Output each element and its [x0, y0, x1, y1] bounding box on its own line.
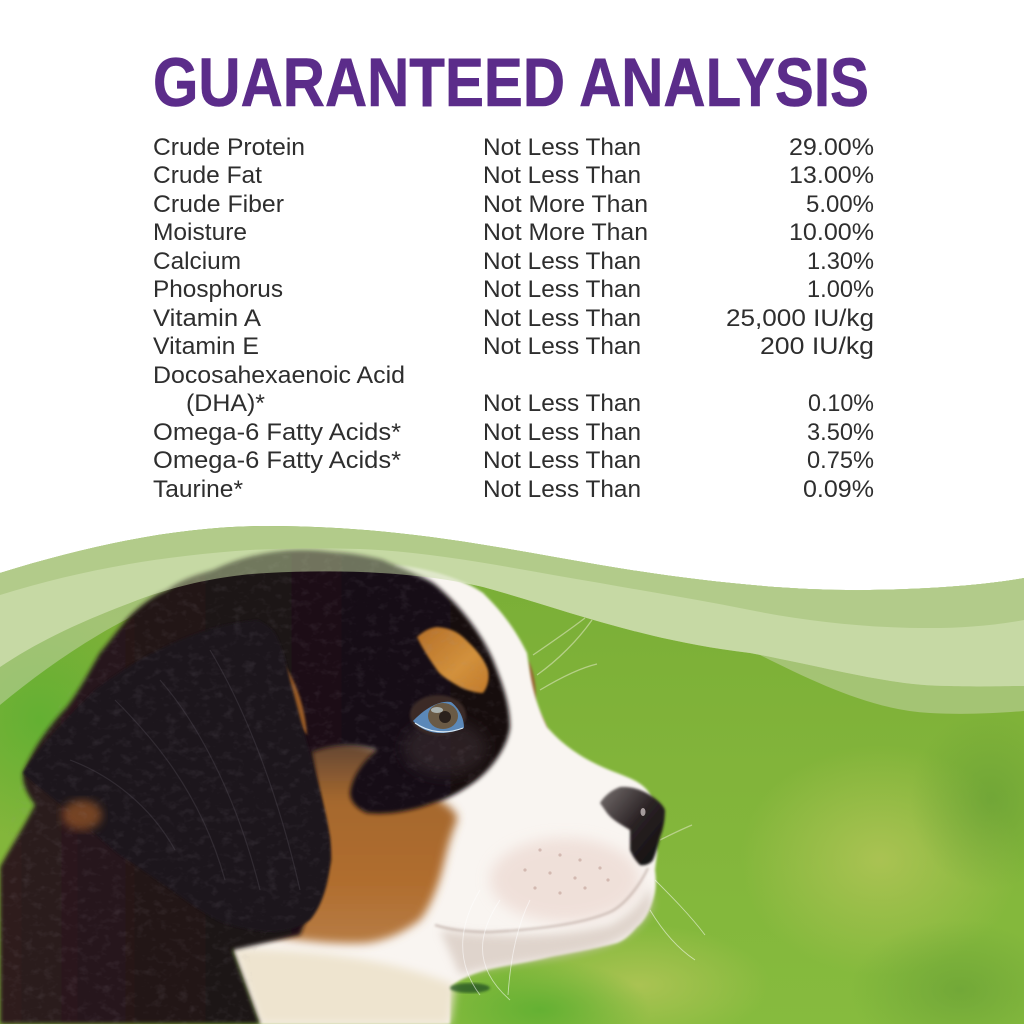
- collar bits: [450, 983, 490, 993]
- puppy photo illustration: [0, 540, 705, 1024]
- values: 5.00%: [806, 191, 874, 218]
- chest cream: [233, 948, 455, 1024]
- wave band top: [0, 520, 1024, 628]
- qualifiers: Not Less Than: [483, 447, 641, 474]
- ear fur highlights: [70, 650, 300, 890]
- qualifiers: Not Less Than: [483, 276, 641, 303]
- nutrient names: Omega-6 Fatty Acids*: [153, 447, 401, 474]
- values: 1.00%: [807, 276, 874, 303]
- values: 0.10%: [808, 390, 874, 417]
- analysis table: [153, 134, 874, 503]
- nose: [600, 787, 665, 865]
- tan ear strip: [283, 663, 307, 735]
- ear: [23, 620, 331, 932]
- fur texture: [2, 572, 500, 1024]
- qualifiers: Not Less Than: [483, 305, 641, 332]
- nutrient names: Crude Fiber: [153, 191, 284, 218]
- wave overlay across top of head: [150, 548, 760, 655]
- qualifiers: [483, 134, 648, 503]
- values: 0.75%: [807, 447, 874, 474]
- qualifiers: Not Less Than: [483, 162, 641, 189]
- qualifiers: Not Less Than: [483, 476, 641, 503]
- values: 29.00%: [789, 134, 874, 161]
- nutrient names: Calcium: [153, 248, 241, 275]
- tan cheek patch: [260, 740, 457, 943]
- qualifiers: Not More Than: [483, 219, 648, 246]
- nutrient names: Crude Protein: [153, 134, 305, 161]
- mouth line: [435, 868, 648, 932]
- wave band lower translucent: [0, 589, 1024, 714]
- green photo panel with waves and puppy: [0, 520, 1024, 1024]
- qualifiers: Not Less Than: [483, 419, 641, 446]
- values: 1.30%: [807, 248, 874, 275]
- nutrient names: Omega-6 Fatty Acids*: [153, 419, 401, 446]
- values: 13.00%: [789, 162, 874, 189]
- qualifiers: Not Less Than: [483, 134, 641, 161]
- nutrient names: (DHA)*: [186, 390, 265, 417]
- nutrient names: Moisture: [153, 219, 247, 246]
- nutrient names: Taurine*: [153, 476, 243, 503]
- qualifiers: Not More Than: [483, 191, 648, 218]
- nutrient names: Crude Fat: [153, 162, 262, 189]
- muzzle freckles: [523, 848, 610, 895]
- white fur of head and chest: [233, 565, 657, 1024]
- values: [726, 134, 874, 503]
- nutrient names: Vitamin E: [153, 333, 259, 360]
- values: 200 IU/kg: [760, 333, 874, 360]
- nose highlight: [640, 808, 646, 816]
- chin shading: [440, 885, 652, 975]
- qualifiers: Not Less Than: [483, 248, 641, 275]
- ear tan fringe: [62, 800, 102, 830]
- whiskers behind head: [533, 618, 692, 840]
- muzzle pink tint: [490, 838, 640, 922]
- wave band light: [0, 540, 1024, 686]
- values: 0.09%: [803, 476, 874, 503]
- nutrient names: Phosphorus: [153, 276, 283, 303]
- ear tip behind blaze: [528, 660, 548, 732]
- green photo background: [0, 520, 1024, 1024]
- values: 3.50%: [807, 419, 874, 446]
- eye mask brown shading: [403, 720, 487, 776]
- qualifiers: Not Less Than: [483, 333, 641, 360]
- muzzle whiskers: [463, 880, 705, 1000]
- title: GUARANTEED ANALYSIS: [153, 44, 869, 121]
- nutrient names: Vitamin A: [153, 305, 261, 332]
- values: 10.00%: [789, 219, 874, 246]
- qualifiers: Not Less Than: [483, 390, 641, 417]
- eye: [410, 695, 466, 735]
- dark fur silhouette: head and back: [0, 550, 510, 1024]
- nutrient names: Docosahexaenoic Acid: [153, 362, 405, 389]
- nutrient names: [153, 134, 405, 503]
- eyebrow tan spot: [417, 627, 489, 693]
- values: 25,000 IU/kg: [726, 305, 874, 332]
